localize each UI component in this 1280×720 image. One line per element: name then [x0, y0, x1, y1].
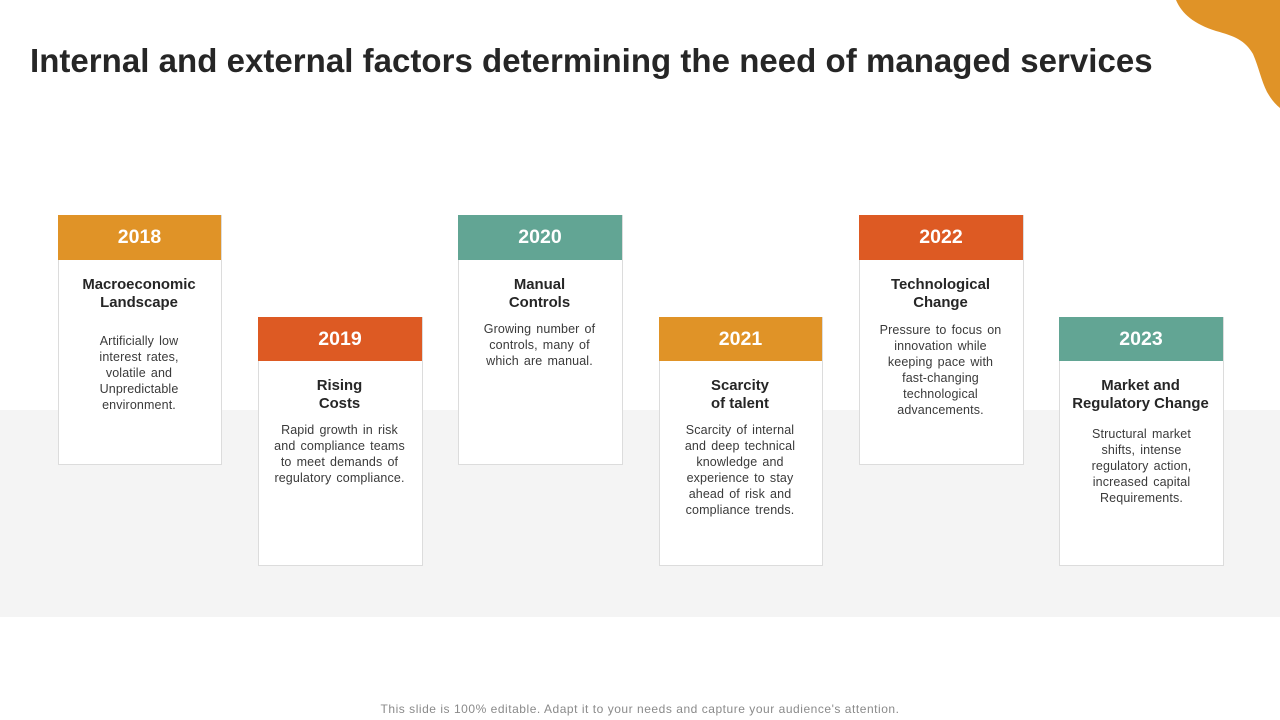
year: 2021: 2021 — [719, 328, 762, 350]
heading: Market and Regulatory Change — [1072, 378, 1209, 412]
text: Rising Costs: and compliance teams — [274, 439, 405, 453]
text: Market and Regulatory Change: increased capital — [1093, 475, 1190, 489]
text: Scarcity of talent: and deep technical — [685, 439, 795, 453]
heading: Technological Change — [891, 277, 990, 311]
text: Market and Regulatory Change: Requirements. — [1100, 491, 1183, 505]
text: Manual Controls: controls, many of — [489, 338, 590, 352]
text: Market and Regulatory Change: shifts, intense — [1102, 443, 1181, 457]
text: Rising Costs: regulatory compliance. — [274, 471, 405, 485]
text: Technological Change — [880, 323, 1001, 417]
text: Rising Costs: Rapid growth in risk — [281, 423, 398, 437]
heading: Manual Controls: Controls — [509, 295, 570, 311]
heading: Technological Change: Change — [913, 295, 968, 311]
text: Scarcity of talent: ahead of risk and — [689, 487, 791, 501]
text: Macroeconomic Landscape: environment. — [102, 398, 176, 412]
text: Technological Change: technological — [903, 387, 978, 401]
heading: Scarcity of talent: of talent — [711, 396, 769, 412]
text: Scarcity of talent: experience to stay — [687, 471, 793, 485]
year: 2018 — [58, 215, 221, 260]
card: 2018 — [58, 215, 222, 465]
corner blob decoration — [1176, 0, 1280, 108]
card: 2019 — [258, 317, 423, 566]
text: Technological Change: keeping pace with — [888, 355, 993, 369]
text: Technological Change: advancements. — [897, 403, 984, 417]
heading: Technological Change: Technological — [891, 277, 990, 293]
heading: Rising Costs: Rising — [317, 378, 362, 394]
year: 2022: 2022 — [919, 226, 963, 248]
text: Macroeconomic Landscape — [99, 334, 179, 412]
text: Macroeconomic Landscape: Unpredictable — [100, 382, 178, 396]
heading: Rising Costs — [317, 378, 362, 412]
heading: Scarcity of talent: Scarcity — [711, 378, 769, 394]
heading: Manual Controls: Manual — [514, 277, 565, 293]
year: 2020: 2020 — [518, 226, 562, 248]
text: Manual Controls — [484, 322, 596, 368]
background band — [0, 410, 1280, 617]
year: 2023: 2023 — [1119, 328, 1163, 350]
year: 2019 — [258, 317, 422, 361]
heading: Rising Costs: Costs — [319, 396, 360, 412]
text: Manual Controls: Growing number of — [484, 322, 595, 336]
year: 2022 — [859, 215, 1023, 260]
year: 2021 — [659, 317, 822, 361]
text: Scarcity of talent — [685, 423, 795, 517]
card: 2022 — [859, 215, 1024, 465]
text: Macroeconomic Landscape: interest rates, — [99, 350, 179, 364]
text: Technological Change: fast-changing — [902, 371, 979, 385]
text: Market and Regulatory Change: regulatory action, — [1092, 459, 1191, 473]
text: Scarcity of talent: knowledge and — [696, 455, 784, 469]
title: Internal and external factors determining the need of managed services — [30, 42, 1153, 79]
text: Market and Regulatory Change: Structural market — [1092, 427, 1191, 441]
heading: Market and Regulatory Change: Market and — [1101, 378, 1180, 394]
text: Rising Costs: to meet demands of — [281, 455, 398, 469]
text: Market and Regulatory Change — [1092, 427, 1191, 505]
footer note: This slide is 100% editable. Adapt it to your needs and capture your audience's attention. — [381, 702, 899, 716]
text: Rising Costs — [274, 423, 405, 485]
text: Manual Controls: which are manual. — [486, 354, 593, 368]
card: 2023 — [1059, 317, 1224, 566]
text: Technological Change: innovation while — [894, 339, 987, 353]
heading: Scarcity of talent — [711, 378, 769, 412]
text: Macroeconomic Landscape: volatile and — [106, 366, 172, 380]
text: Technological Change: Pressure to focus on — [880, 323, 1001, 337]
year: 2018: 2018 — [118, 226, 161, 248]
heading: Macroeconomic Landscape: Macroeconomic — [82, 277, 196, 293]
text: Scarcity of talent: compliance trends. — [686, 503, 794, 517]
heading: Market and Regulatory Change: Regulatory Change — [1072, 396, 1209, 412]
text: Macroeconomic Landscape: Artificially low — [100, 334, 178, 348]
card: 2021 — [659, 317, 823, 566]
text: Scarcity of talent: Scarcity of internal — [686, 423, 794, 437]
heading: Macroeconomic Landscape: Landscape — [100, 295, 178, 311]
heading: Manual Controls — [509, 277, 570, 311]
card: 2020 — [458, 215, 623, 465]
heading: Macroeconomic Landscape — [82, 277, 196, 311]
year: 2019: 2019 — [318, 328, 362, 350]
year: 2020 — [458, 215, 622, 260]
year: 2023 — [1059, 317, 1223, 361]
